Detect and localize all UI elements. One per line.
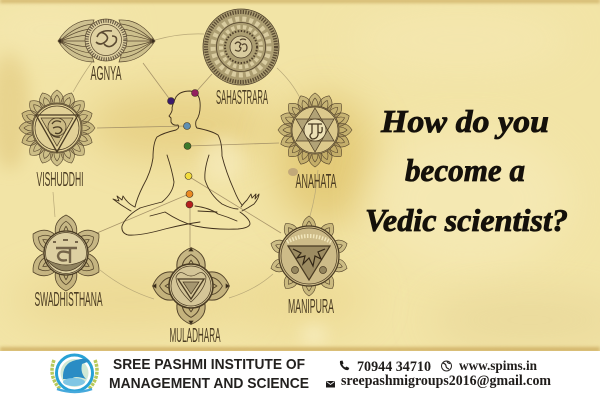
- heading: Vedic scientist?: [365, 202, 568, 238]
- chakra: Sahastrara: [203, 9, 279, 85]
- text: VISHUDDHI: [36, 169, 84, 191]
- chakra: Swadhisthana: [28, 215, 104, 291]
- institute name: MANAGEMENT AND SCIENCE: [109, 375, 309, 392]
- email: sreepashmigroups2016@gmail.com: [341, 373, 551, 389]
- text: SAHASTRARA: [216, 87, 268, 109]
- text: MANIPURA: [288, 296, 334, 318]
- heading: How do you: [380, 103, 549, 139]
- chakra: Agnya: [58, 19, 155, 62]
- heading: [365, 103, 568, 238]
- chakra: Muladhara: [153, 248, 229, 324]
- institute name: SREE PASHMI INSTITUTE OF: [113, 356, 305, 373]
- chakra dots on the body: [168, 90, 198, 208]
- connecting arcs between chakras: [53, 34, 318, 299]
- chakra: Vishuddhi: [19, 90, 95, 166]
- icon: globe: [442, 361, 452, 371]
- logo: [52, 355, 97, 392]
- text: ANAHATA: [296, 171, 337, 193]
- chakra: Anahata: [278, 93, 352, 167]
- icon: mail: [326, 381, 335, 388]
- text: MULADHARA: [170, 325, 221, 347]
- chakra: Manipura: [269, 216, 349, 296]
- connector lines from body dots to chakras: [97, 63, 281, 247]
- text: AGNYA: [90, 63, 122, 85]
- text: SWADHISTHANA: [34, 289, 103, 311]
- footer band: [0, 351, 600, 400]
- website: www.spims.in: [459, 359, 537, 374]
- phone number: 70944 34710: [357, 359, 431, 375]
- institute name: [109, 356, 309, 392]
- icon: phone: [340, 360, 349, 370]
- meditating figure: [113, 91, 259, 235]
- heading: become a: [405, 152, 525, 188]
